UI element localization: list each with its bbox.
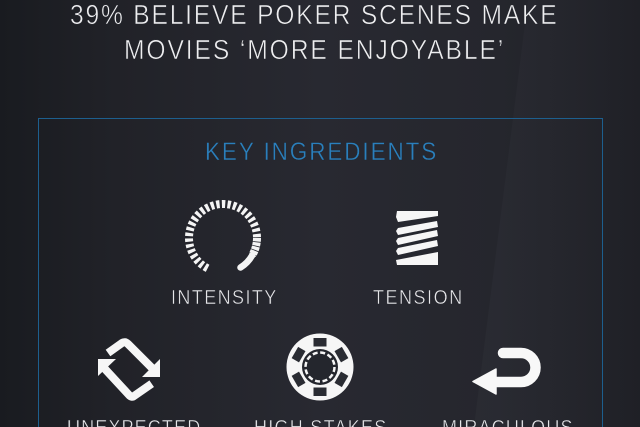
panel: key ingredients [38, 118, 602, 427]
icon: tension spring [396, 211, 438, 265]
label: tension: TENSION [373, 287, 462, 309]
panel heading: KEY INGREDIENTS [205, 138, 436, 166]
heading: MOVIES ‘MORE ENJOYABLE’ [124, 34, 503, 65]
icon: poker chip [286, 334, 354, 400]
icon: miraculous return arrow [473, 353, 536, 394]
icon: intensity gauge [189, 204, 257, 268]
icon: unexpected arrows [98, 342, 160, 397]
heading [70, 0, 557, 65]
label: intensity: INTENSITY [171, 287, 277, 309]
